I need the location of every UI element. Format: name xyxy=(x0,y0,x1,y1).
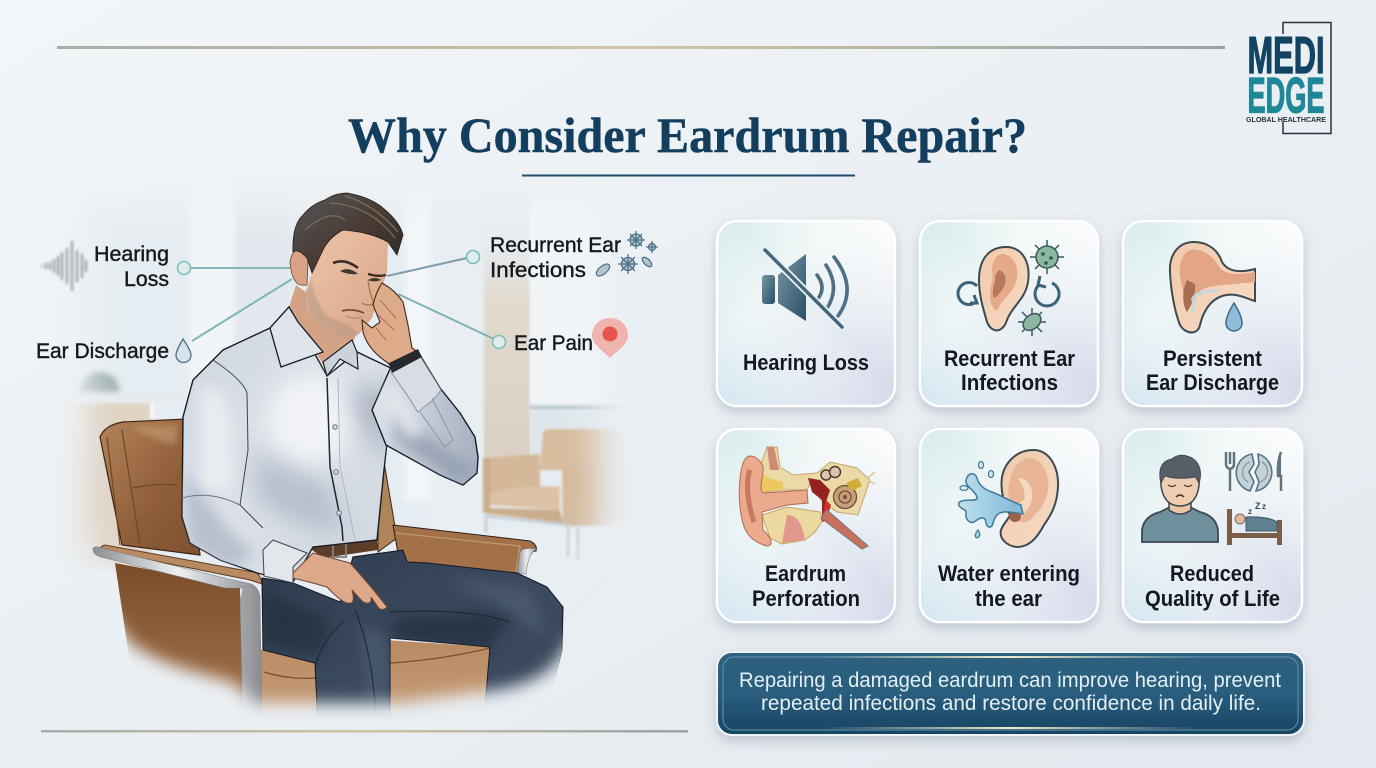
belt xyxy=(312,540,378,557)
label: ear discharge: Ear Discharge xyxy=(36,340,169,363)
callout banner: repeated infections and restore confidence in daily life. xyxy=(761,692,1261,715)
chair right arm xyxy=(393,525,536,575)
icon: restless bed: Z xyxy=(1255,501,1261,511)
card: water entering the ear: Water entering xyxy=(938,561,1080,586)
hand at ear xyxy=(362,283,418,368)
label: hearing loss: Loss xyxy=(124,268,169,291)
logo: MediEdge Global Healthcare: MEDI xyxy=(1248,27,1324,85)
watch xyxy=(389,349,422,373)
chair left arm and front panel xyxy=(93,545,262,730)
card: eardrum perforation xyxy=(717,429,895,622)
shirt cuff, lower left xyxy=(263,540,307,583)
face details xyxy=(333,261,358,268)
icon: restless bed: z xyxy=(1248,507,1252,516)
chair back xyxy=(100,419,200,555)
card: water entering the ear xyxy=(920,429,1098,622)
icon: water splashing into ear xyxy=(959,450,1058,547)
icon: ear anatomy cross-section xyxy=(739,447,875,549)
callout banner: Repairing a damaged eardrum can improve hearing, prevent xyxy=(739,669,1281,692)
icon: ear with discharge and droplet xyxy=(1170,242,1255,332)
collar xyxy=(270,307,323,367)
card: persistent ear discharge xyxy=(1123,221,1302,406)
icon: germs cluster xyxy=(594,231,658,278)
label: recurrent ear infections xyxy=(490,234,621,282)
bottom gold rule xyxy=(41,730,688,732)
icon: muted speaker xyxy=(762,250,847,327)
card: hearing loss: Hearing Loss xyxy=(743,350,869,375)
label: ear pain: Ear Pain xyxy=(514,332,593,355)
card: reduced quality of life: Reduced xyxy=(1170,561,1254,586)
icon: small droplet xyxy=(176,339,191,363)
desk and lamp xyxy=(74,402,152,570)
icon: tired person xyxy=(1142,455,1218,542)
label: hearing loss: Hearing xyxy=(94,243,169,266)
illustration: man seated in leather armchair xyxy=(93,193,563,730)
title underline xyxy=(522,174,855,176)
chair seat xyxy=(250,640,490,730)
title: Why Consider Eardrum Repair? xyxy=(348,107,1027,163)
card: reduced quality of life xyxy=(1123,429,1302,622)
label: hearing loss xyxy=(94,243,169,291)
trousers xyxy=(262,550,563,730)
card: persistent ear discharge: Persistent xyxy=(1163,346,1263,371)
card: recurrent ear infections: Recurrent Ear xyxy=(944,346,1075,371)
connector: recurrent ear infections xyxy=(387,250,480,276)
connector: ear pain xyxy=(398,294,506,348)
logo: MediEdge Global Healthcare: GLOBAL HEALTHCARE xyxy=(1246,117,1326,124)
sofa in background xyxy=(482,428,618,560)
icon: restless bed: z xyxy=(1262,502,1266,511)
connector: ear discharge xyxy=(192,279,292,341)
icon: sound wave xyxy=(42,241,86,291)
head: ear and face xyxy=(290,250,308,285)
icon: restless bed xyxy=(1227,501,1282,545)
resting hand on knee xyxy=(293,553,387,610)
label: recurrent ear infections: Infections xyxy=(490,259,586,282)
logo: MediEdge Global Healthcare xyxy=(1246,22,1331,134)
chair back right strip xyxy=(378,462,397,552)
connector: hearing loss xyxy=(178,262,290,274)
callout banner xyxy=(717,652,1304,735)
card: water entering the ear: the ear xyxy=(975,586,1042,611)
icon: red pain pin xyxy=(592,318,628,358)
card: recurrent ear infections xyxy=(920,221,1098,406)
illustration: blurred clinic room xyxy=(72,210,618,570)
card: reduced quality of life: Quality of Life xyxy=(1145,586,1280,611)
shirt torso and left arm xyxy=(182,307,395,582)
card: persistent ear discharge: Ear Discharge xyxy=(1146,370,1279,395)
card: eardrum perforation: Eardrum xyxy=(765,561,846,586)
icon: fork, broken plate and knife xyxy=(1226,452,1281,491)
card: recurrent ear infections: Infections xyxy=(961,370,1058,395)
neck xyxy=(289,285,358,368)
card: eardrum perforation: Perforation xyxy=(752,586,860,611)
room floor xyxy=(395,530,680,630)
raised arm sleeve xyxy=(372,355,478,485)
icon: ear with germs and cycle arrows xyxy=(958,240,1064,336)
label: recurrent ear infections: Recurrent Ear xyxy=(490,234,621,257)
hair xyxy=(293,193,403,273)
card: hearing loss xyxy=(717,221,895,406)
top gold rule xyxy=(57,46,1225,49)
